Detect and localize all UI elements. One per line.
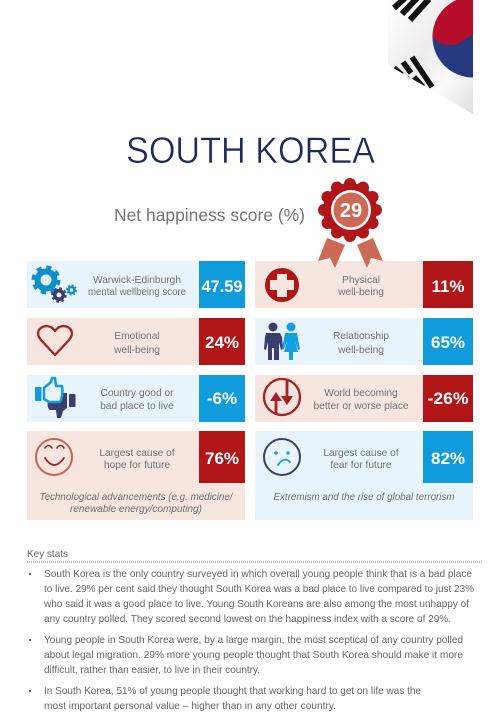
- panel: country good or bad: Country good or: [100, 388, 174, 399]
- text block: bullet one: [29, 569, 474, 625]
- panel: world better or worse: [255, 375, 473, 422]
- text block: bullet three: most important personal value – higher than in any other country.: [44, 701, 336, 712]
- icon: award badge 29: [318, 178, 383, 268]
- panel: mental wellbeing score: Warwick-Edinburgh: [93, 275, 181, 286]
- panel: hope for future: [27, 431, 245, 520]
- text block: bullet one: who said it was a good place to live. Young South Koreans are also among the most unhappy of: [43, 599, 469, 610]
- panel: physical well-being: 11%: [431, 277, 465, 296]
- panel: hope for future: Largest cause of: [99, 448, 175, 459]
- title: SOUTH KOREA: [126, 129, 375, 171]
- text block: bullet one: any country polled. They scored second lowest on the happiness index with a score of 29%.: [44, 614, 451, 625]
- text block: bullet two: Young people in South Korea were, by a large margin, the most sceptical of any country polled: [44, 635, 463, 646]
- panel: country good or bad: -6%: [207, 389, 237, 408]
- panel: emotional well-being: 24%: [205, 333, 239, 352]
- icon: South Korean flag: [388, 0, 473, 114]
- icon: up and down arrows in circle: [264, 379, 300, 415]
- text block: bullet one: South Korea is the only country surveyed in which overall young people think that is a bad place: [44, 569, 472, 580]
- icon: smiling face: [36, 439, 72, 475]
- icon: gears: [34, 268, 76, 302]
- panel: fear for future: Extremism and the rise of global terrorism: [274, 492, 454, 503]
- panel: emotional well-being: Emotional: [114, 331, 160, 342]
- heading: key stats: Key stats: [27, 548, 68, 560]
- panel: relationship well-being: [255, 318, 473, 365]
- panel: fear for future: Largest cause of: [323, 448, 399, 459]
- panel: relationship well-being: Relationship: [333, 331, 389, 342]
- text block: bullet one: to live. 29% per cent said they thought South Korea was a bad place to live compared to just 23%: [44, 584, 474, 595]
- panel: physical well-being: [255, 261, 473, 308]
- panel: hope for future: Technological advancements (e.g. medicine/: [40, 492, 234, 503]
- icon: thumbs up and down: [35, 378, 76, 418]
- icon: couple: [264, 322, 300, 360]
- text block: bullet three: [29, 686, 421, 712]
- panel: mental wellbeing score: 47.59: [202, 277, 242, 296]
- panel: emotional well-being: [27, 318, 245, 365]
- panel: fear for future: 82%: [431, 449, 465, 468]
- text block: bullet two: about legal migration. 29% more young people thought that South Korea should make it more: [44, 650, 463, 661]
- panel: world better or worse: -26%: [428, 389, 468, 408]
- icon: heart: [38, 326, 72, 355]
- panel: fear for future: [255, 431, 473, 520]
- panel: physical well-being: Physical: [342, 275, 380, 286]
- icon: award badge 29: 29: [340, 200, 362, 222]
- panel: world better or worse: better or worse place: [314, 401, 409, 412]
- panel: hope for future: renewable energy/computing): [70, 504, 202, 515]
- panel: country good or bad: [27, 375, 245, 422]
- text block: bullet three: In South Korea, 51% of young people thought that working hard to get on life was the: [44, 686, 421, 697]
- panel: relationship well-being: 65%: [431, 333, 465, 352]
- panel: mental wellbeing score: [27, 261, 245, 308]
- heading: net happiness score: Net happiness score (%): [114, 205, 305, 225]
- text block: bullet two: difficult, rather than easier, to live in their country.: [44, 665, 260, 676]
- panel: fear for future: fear for future: [330, 460, 392, 471]
- panel: hope for future: hope for future: [104, 460, 170, 471]
- icon: sad face: [264, 439, 300, 475]
- panel: emotional well-being: well-being: [113, 345, 160, 356]
- panel: physical well-being: well-being: [337, 287, 384, 298]
- panel: country good or bad: bad place to live: [100, 401, 174, 412]
- panel: relationship well-being: well-being: [337, 345, 384, 356]
- text block: bullet two: [29, 635, 463, 676]
- panel: mental wellbeing score: mental wellbeing score: [88, 287, 186, 298]
- icon: medical cross: [265, 268, 299, 302]
- panel: world better or worse: World becoming: [324, 388, 398, 399]
- panel: hope for future: 76%: [205, 449, 239, 468]
